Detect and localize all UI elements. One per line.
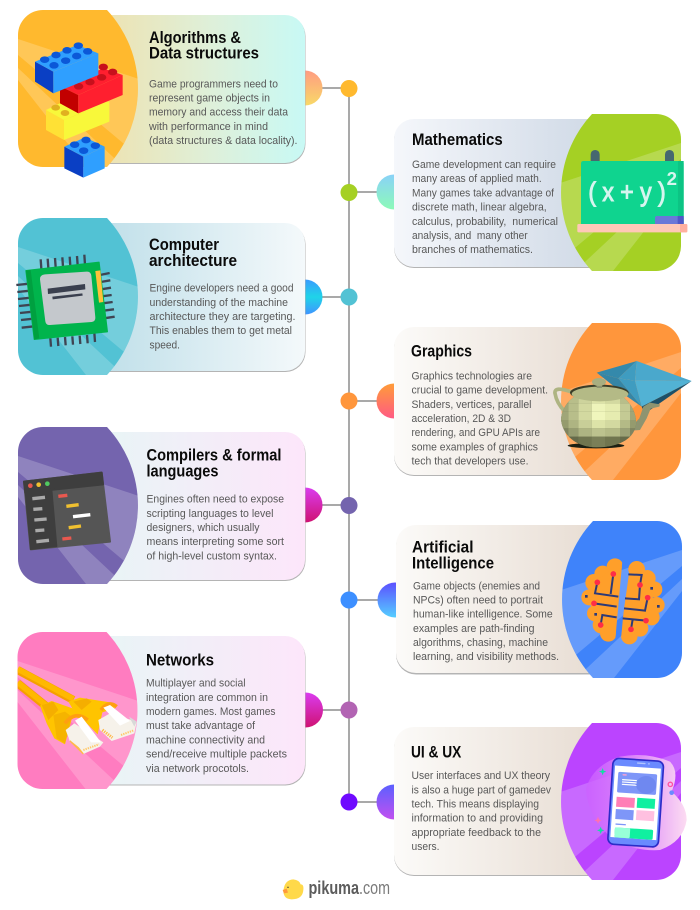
body text: Many games take advantage of: [412, 187, 555, 199]
heading: Artificial: [412, 539, 474, 557]
card: [394, 119, 619, 268]
panel: artificial intelligence: [378, 521, 682, 682]
connector tab: [288, 488, 322, 522]
body text: Multiplayer and social: [146, 678, 246, 690]
body text: crucial to game development.: [412, 384, 548, 396]
panel: networks: [18, 632, 323, 793]
body text: NPCs) often need to portrait: [413, 594, 543, 606]
timeline: [322, 88, 378, 802]
icon: circuit brain: [581, 558, 665, 644]
colour blob: [18, 218, 148, 379]
body text: Game programmers need to: [149, 78, 278, 90]
colour blob: [551, 323, 681, 484]
card: [396, 525, 621, 674]
body text: Engine developers need a good: [150, 283, 294, 295]
body text: This enables them to get metal: [150, 325, 292, 337]
body text: [413, 580, 559, 663]
body text: [150, 283, 296, 351]
heading: Mathematics: [412, 131, 503, 149]
panel: mathematics: [376, 114, 687, 275]
body text: learning, and visibility methods.: [413, 651, 559, 663]
connector tab: [288, 280, 322, 314]
body text: analysis, and many other: [412, 230, 528, 242]
card: [394, 727, 619, 876]
heading: [146, 447, 282, 481]
body text: (data structures & data locality).: [149, 135, 298, 147]
heading: Networks: [146, 652, 214, 670]
body text: represent game objects in: [149, 92, 270, 104]
body text: calculus, probability, numerical: [412, 216, 558, 228]
icon: chalkboard: [577, 150, 687, 232]
body text: human-like intelligence. Some: [413, 609, 553, 621]
body text: [146, 494, 284, 562]
heading: architecture: [149, 252, 237, 270]
card: [80, 15, 306, 164]
body text: Shaders, vertices, parallel: [412, 399, 532, 411]
body text: architecture they are targeting.: [150, 311, 296, 323]
body text: is also a huge part of gamedev: [412, 784, 551, 796]
body text: scripting languages to level: [146, 508, 274, 520]
heading: [412, 539, 494, 573]
colour blob: [18, 10, 148, 171]
body text: via network procotols.: [146, 763, 249, 775]
body text: some examples of graphics: [412, 441, 538, 453]
card: [80, 432, 306, 581]
colour blob: [551, 723, 681, 884]
icon: microchip: [16, 255, 115, 347]
body text: examples are path-finding: [413, 623, 534, 635]
body text: [148, 78, 298, 147]
body text: User interfaces and UX theory: [412, 770, 550, 782]
body text: tech that developers use.: [412, 456, 528, 468]
panel: ui and ux: [376, 723, 687, 884]
heading: [149, 29, 259, 62]
body text: send/receive multiple packets: [146, 749, 287, 761]
panel: computer architecture: [16, 218, 323, 379]
body text: memory and access their data: [149, 107, 289, 119]
logo: pikuma.com: [283, 878, 390, 899]
body text: branches of mathematics.: [412, 244, 533, 256]
body text: Engines often need to expose: [146, 494, 284, 506]
heading: Algorithms &: [149, 29, 241, 47]
panel: graphics: [376, 323, 692, 484]
timeline nodes: [340, 80, 358, 810]
heading: [149, 236, 237, 270]
body text: information to and providing: [412, 813, 543, 825]
body text: tech. This means displaying: [412, 798, 539, 810]
colour blob: [551, 114, 681, 275]
colour blob: [552, 521, 682, 682]
connector tab: [288, 692, 323, 728]
body text: speed.: [150, 339, 180, 351]
icon: teapot and gem: [555, 361, 692, 450]
icon: smartphone: [586, 755, 687, 850]
body text: algorithms, chasing, machine: [413, 637, 548, 649]
panel: algorithms and data structures: [18, 10, 322, 178]
card: [80, 223, 306, 372]
body text: discrete math, linear algebra,: [412, 202, 547, 214]
icon: code editor window: [24, 473, 110, 549]
body text: integration are common in: [146, 692, 268, 704]
connector tab: [376, 384, 412, 418]
body text: of high-level custom syntax.: [146, 550, 277, 562]
connector tab: [288, 70, 322, 106]
heading: Intelligence: [412, 555, 494, 573]
body text: [412, 370, 548, 468]
heading: Graphics: [411, 343, 472, 361]
colour blob: [18, 632, 148, 793]
wordmark: .com: [359, 878, 390, 898]
icon: network cables: [18, 669, 137, 754]
colour blob: [18, 427, 148, 588]
icon: chalkboard: 2: [667, 168, 677, 189]
body text: [146, 678, 287, 775]
body text: Graphics technologies are: [412, 370, 532, 382]
body text: [412, 770, 551, 853]
connector tab: [378, 582, 412, 618]
connector tab: [376, 784, 412, 820]
body text: modern games. Most games: [146, 706, 276, 718]
body text: understanding of the machine: [150, 297, 288, 309]
body text: many areas of applied math.: [412, 173, 542, 185]
panel: compilers and formal languages: [18, 427, 322, 588]
heading: Computer: [149, 236, 220, 254]
wordmark: pikuma: [308, 878, 360, 898]
heading: Compilers & formal: [146, 447, 282, 465]
body text: designers, which usually: [146, 522, 260, 534]
connector tab: [376, 174, 412, 210]
card: [80, 636, 306, 786]
body text: rendering, and GPU APIs are: [412, 427, 540, 439]
body text: users.: [412, 841, 440, 853]
body text: means interpreting some sort: [146, 536, 284, 548]
heading: UI & UX: [411, 743, 461, 761]
body text: Game objects (enemies and: [413, 580, 540, 592]
icon: duck: [283, 879, 303, 899]
body text: appropriate feedback to the: [412, 827, 541, 839]
icon: lego bricks: [35, 42, 123, 178]
heading: languages: [146, 463, 218, 481]
body text: acceleration, 2D & 3D: [412, 413, 511, 425]
icon: chalkboard: ( x + y ): [588, 177, 666, 207]
body text: Game development can require: [412, 159, 556, 171]
body text: [412, 159, 558, 256]
body text: must take advantage of: [146, 720, 256, 732]
body text: with performance in mind: [148, 121, 268, 133]
card: [394, 327, 619, 476]
body text: machine connectivity and: [146, 734, 265, 746]
heading: Data structures: [149, 44, 259, 62]
